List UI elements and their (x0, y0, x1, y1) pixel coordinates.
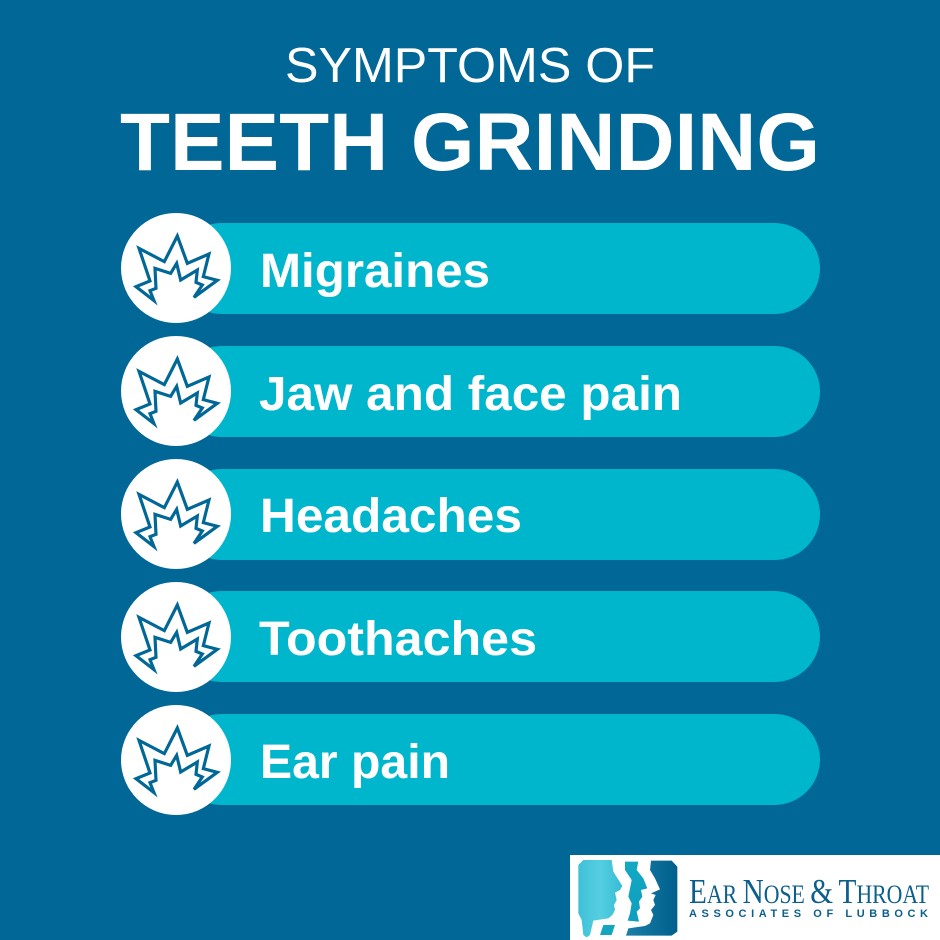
logo tagline: ASSOCIATES OF LUBBOCK (689, 908, 928, 920)
icon: burst in circle (121, 459, 231, 569)
title line: teeth grinding: TEETH GRINDING (120, 97, 820, 188)
bar (176, 469, 820, 560)
logo wordmark: EAR NOSE & THROAT (689, 872, 929, 911)
bar (176, 223, 820, 314)
symptom row: headaches (121, 459, 820, 569)
label: Jaw and face pain (259, 368, 682, 421)
icon: burst in circle (121, 213, 231, 323)
symptom row: jaw and face pain (121, 336, 820, 446)
icon: burst in circle (121, 336, 231, 446)
logo icon: three face profiles (578, 860, 677, 937)
title (120, 39, 820, 188)
label: Headaches (260, 490, 522, 543)
bar (176, 591, 820, 682)
title line: symptoms of: SYMPTOMS OF (285, 39, 655, 93)
icon: burst in circle (121, 582, 231, 692)
symptom row: toothaches (121, 582, 820, 692)
label: Migraines (260, 245, 490, 298)
bar (176, 714, 820, 805)
label: Ear pain (260, 736, 450, 789)
label: Toothaches (259, 613, 537, 666)
symptom row: ear pain (121, 705, 820, 815)
symptom row: migraines (121, 213, 820, 323)
bar (176, 346, 820, 437)
icon: burst in circle (121, 705, 231, 815)
logo panel (570, 855, 940, 940)
